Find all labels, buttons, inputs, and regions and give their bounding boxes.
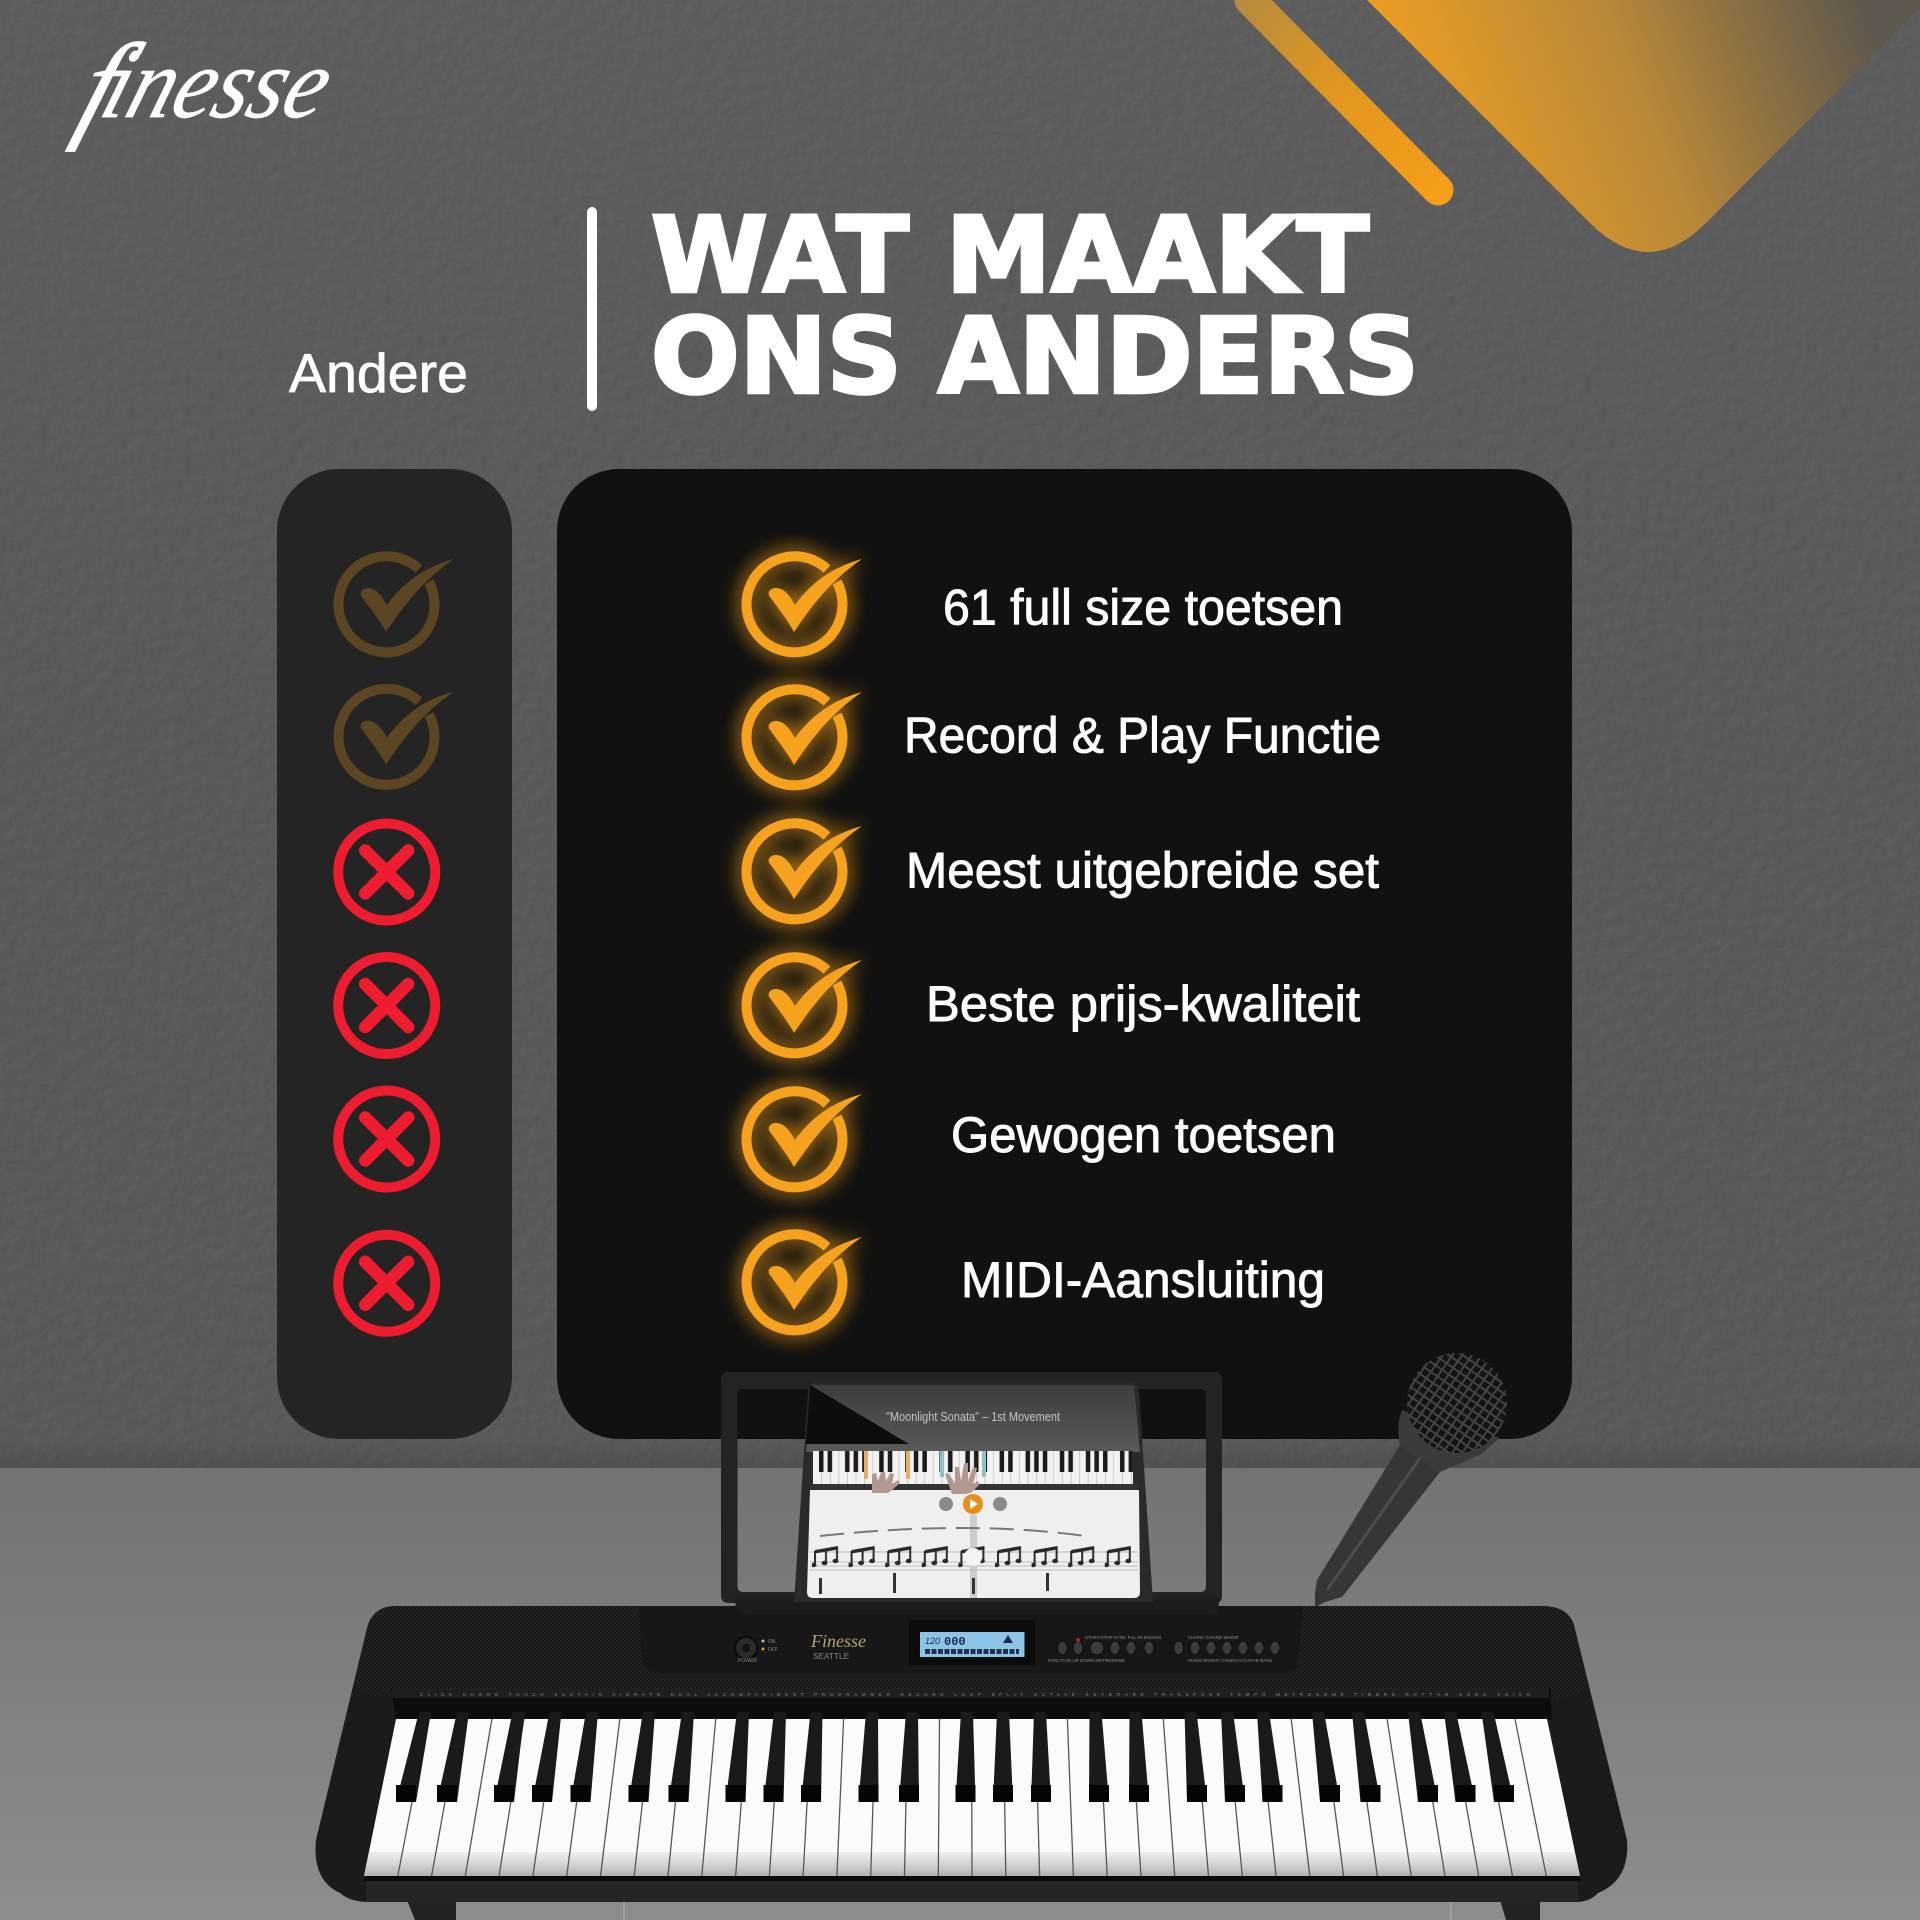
brand badge: Finesse [810,1631,866,1651]
icon: red cross 4 [338,1235,435,1332]
microphone handle [1315,1445,1440,1607]
icon: glowing check 1 [747,556,862,652]
microphone mesh head [1407,1353,1507,1453]
LCD display: 120 [925,1636,940,1646]
logo: finesse: f [64,19,155,152]
feature labels [904,580,1381,1308]
icon: dim check 1 [339,556,454,652]
panel button captions: CHORD CHORD MINOR [1188,1635,1239,1640]
control panel [639,1606,1303,1673]
icon: red cross 1 [338,824,435,920]
panel button captions: START/STOP SYNC FILL-IN ENDING [1085,1635,1162,1640]
feature: MIDI-Aansluiting: MIDI-Aansluiting [961,1252,1325,1308]
black keys [396,1712,1514,1802]
app buttons [939,1494,1007,1514]
power knob [735,1637,778,1664]
brand badge: SEATTLE [813,1652,849,1661]
white keys [364,1719,1580,1876]
decorative orange rounded triangle [1367,0,1920,252]
panel button captions: PIANO BRIGHT CHURCH GUITAR BASS [1188,1658,1272,1663]
column heading: Andere: Andere [289,342,468,404]
microphone collar [1398,1410,1500,1472]
tablet piano keys [813,1451,1133,1484]
panel buttons [1058,1641,1280,1655]
microphone [1315,1353,1507,1607]
title [651,194,1419,418]
front rail [364,1876,1580,1902]
staff and notes [810,1515,1138,1598]
tablet corner triangle [806,1385,909,1444]
feature: Gewogen toetsen: Gewogen toetsen [951,1107,1336,1163]
feature: 61 full size toetsen: 61 full size toetsen [943,580,1343,636]
panel button captions [1048,1635,1272,1663]
hands [872,1463,980,1494]
keyboard stand legs [407,1900,1540,1920]
panel: finesse column [557,469,1572,1439]
icon: glowing check 2 [747,689,862,785]
title: ONS ANDERS [651,296,1419,418]
key label strip: CLICK CHORD TOUCH SUSTAIN VIBRATO DUAL ACCOMPANIMENT PROGRAMMER RECORD LOOP SPLIT OCTAVE KEYBOARD TRANSPOSE TEMPO METRONOME TIMBRE RHYTHM SONG VOICE [420,1692,1530,1697]
power knob: POWER [738,1658,757,1664]
power knob: OFF [768,1647,778,1653]
music stand [721,1372,1222,1614]
tablet sheet music [807,1490,1140,1598]
power knob: ON [768,1639,776,1645]
keyboard body [316,1606,1627,1902]
highlighted keys [864,1451,910,1479]
decorative orange stripe [1250,0,1438,190]
brand badge [810,1631,866,1661]
keyboard [316,1606,1627,1902]
icon: red cross 3 [338,1090,435,1188]
LCD display: 000 [944,1635,966,1649]
divider line [587,207,597,411]
icon: glowing check 6 [747,1234,862,1330]
icon: dim check 2 [339,689,454,785]
tablet with piano app [794,1382,1153,1602]
panel button captions: FUNCTION UP DOWN METRONOME [1048,1658,1125,1663]
icon: red cross 2 [338,957,435,1054]
icon: glowing check 3 [747,823,862,919]
LCD display [909,1620,1035,1665]
icon: glowing check 4 [747,957,862,1053]
speaker grilles [356,1606,1587,1698]
panel: others column [277,469,512,1439]
key label strip [391,1688,1552,1720]
feature: Beste prijs-kwaliteit: Beste prijs-kwaliteit [926,976,1360,1032]
logo: finesse: inesse [90,29,347,139]
tablet song title: "Moonlight Sonata" – 1st Movement [886,1409,1060,1424]
feature: Meest uitgebreide set: Meest uitgebreide set [906,842,1379,898]
feature: Record & Play Functie: Record & Play Functie [904,708,1381,764]
icon: glowing check 5 [747,1091,862,1187]
title: WAT MAAKT [651,194,1369,316]
